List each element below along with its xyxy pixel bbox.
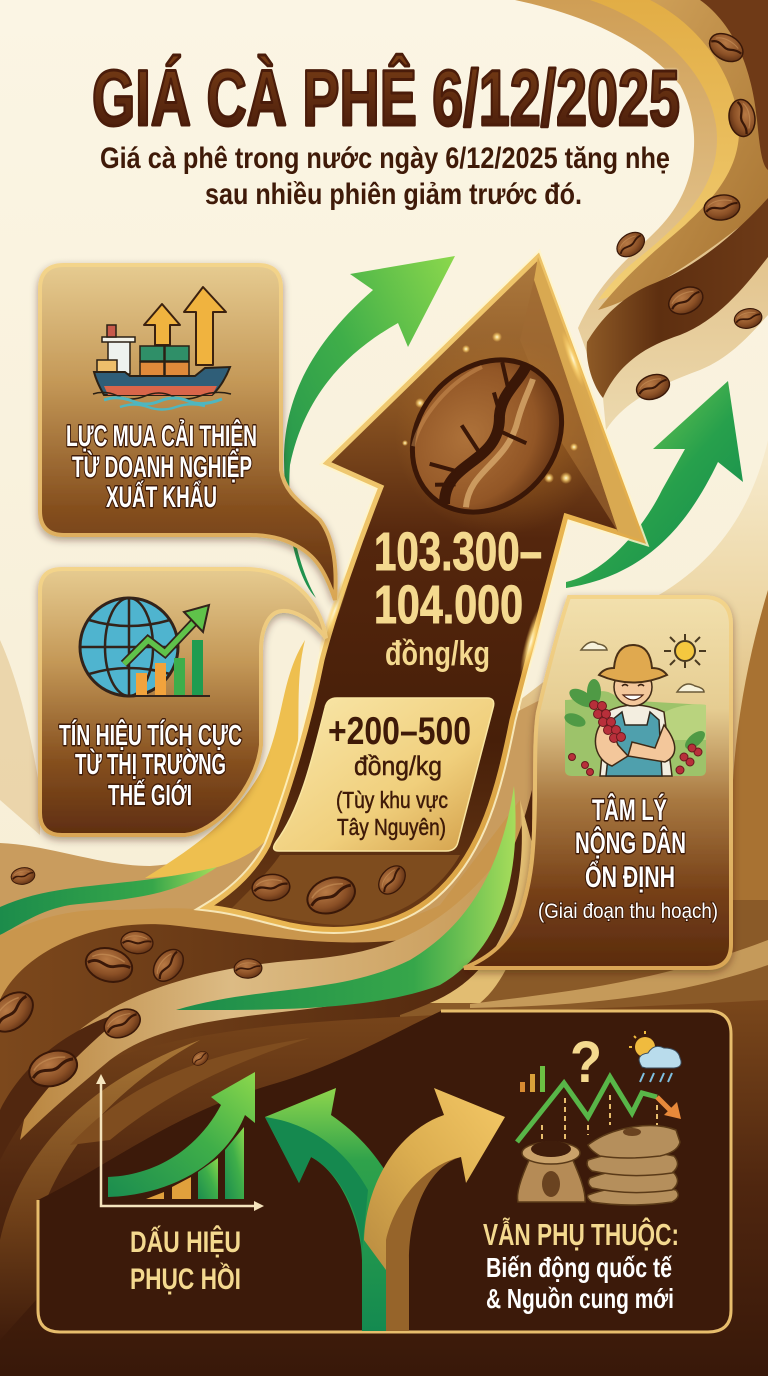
price text: [374, 522, 542, 673]
card three text: TÂM LÝ: [592, 793, 667, 827]
panel: world market: TỪ THỊ TRƯỜNG: [75, 747, 226, 781]
chart axes: [101, 1080, 258, 1206]
background: gold band: [0, 800, 520, 1000]
arrow glow spot: [395, 335, 605, 535]
background: main brown wave: [587, 198, 768, 398]
change badge: (Tùy khu vực: [336, 787, 448, 813]
under-sweep: [232, 855, 460, 925]
background: light stripe below farmer card: [470, 940, 768, 1008]
sparkles: [402, 332, 578, 484]
background: top right dark brown corner: [700, 0, 768, 170]
card one shape: [40, 265, 336, 600]
gold branch: [364, 1088, 505, 1270]
green branch: [265, 1088, 386, 1331]
question mark: ?: [570, 1030, 602, 1095]
arrow right bevel: [534, 257, 642, 540]
panel fill: [38, 1011, 731, 1332]
glint left: [315, 565, 355, 655]
label: dependency: VẪN PHỤ THUỘC:: [483, 1216, 679, 1252]
falling arrow head: [664, 1102, 681, 1119]
panel: farmer sentiment: [464, 597, 731, 968]
panel: export buying: TỪ DOANH NGHIỆP: [72, 450, 252, 484]
background: top right pale tan swirl: [515, 0, 768, 430]
panel: farmer sentiment: ỔN ĐỊNH: [585, 860, 675, 894]
fork arrows: [265, 1088, 505, 1331]
icon: smiling farmer with coffee cherries: [563, 634, 708, 776]
green arrow right: [566, 381, 743, 588]
axis arrowheads: [96, 1074, 264, 1211]
arrow halo: [207, 257, 642, 929]
background: cream tan band: [20, 870, 490, 1140]
background: top right gold swirl: [590, 0, 768, 300]
price text: 103.300–: [374, 522, 542, 582]
rising arrow: [108, 1072, 255, 1197]
change badge: Tây Nguyên): [337, 814, 446, 840]
icon: globe with growth chart: [80, 598, 210, 697]
green branch inner: [265, 1117, 368, 1250]
icon: cargo ship with rising arrows: [93, 287, 231, 410]
card one text: LỰC MUA CẢI THIỆN: [66, 419, 257, 453]
background: mid streak: [70, 1038, 310, 1145]
dashed guides: [542, 1095, 657, 1150]
change badge: đồng/kg: [354, 751, 442, 781]
background: right tan swirl: [520, 440, 768, 1020]
background: right edge stripes: [732, 590, 768, 1020]
background: area below farmer card: [400, 900, 768, 1040]
weather: [629, 1031, 681, 1082]
background: lower tan field: [0, 700, 540, 1060]
chart: recovery sign: [96, 1072, 264, 1211]
falling orange arrow: [657, 1097, 672, 1112]
background: gold band right of green: [430, 800, 534, 1003]
background: green band lower: [176, 786, 516, 1010]
badge shape: [274, 698, 494, 851]
panel: export buying: XUẤT KHẨU: [106, 480, 217, 514]
small bars: [520, 1066, 545, 1092]
panel: farmer sentiment: (Giai đoạn thu hoạch): [538, 900, 718, 923]
brown branch: [386, 1157, 461, 1331]
subtitle: [100, 142, 670, 211]
icon: volatility chart, sacks and weather: [517, 1030, 681, 1205]
central arrow: [207, 257, 642, 929]
panel: world market: THẾ GIỚI: [108, 778, 192, 812]
glint right: [558, 329, 588, 389]
badge text: +200–500: [328, 710, 471, 753]
panel: farmer sentiment: NỘNG DÂN: [575, 826, 686, 860]
background: green ribbon left: [0, 867, 217, 935]
label: dependency: & Nguồn cung mới: [486, 1283, 674, 1314]
label: dependency: Biến động quốc tế: [486, 1252, 672, 1283]
arrow body: [207, 257, 642, 929]
background: brown band: [0, 790, 532, 1110]
arrow light facet: [520, 280, 618, 532]
chart bars: [146, 1127, 244, 1199]
stacked bags: [587, 1126, 680, 1205]
card three shape: [464, 597, 731, 968]
background: left pale wisps: [0, 640, 40, 835]
label: recovery sign: DẤU HIỆU: [130, 1225, 241, 1259]
beans scattered: [0, 28, 764, 1092]
subtitle: sau nhiều phiên giảm trước đó.: [205, 178, 582, 211]
panel border: [38, 1011, 731, 1332]
green arrow top: [284, 256, 455, 598]
panel: export buying: [40, 265, 336, 600]
label: recovery sign: [130, 1225, 241, 1296]
sack: [518, 1141, 585, 1202]
background: top right tan band: [598, 0, 768, 310]
background: yellow swoosh behind card two: [145, 640, 305, 878]
card two shape: [40, 569, 326, 835]
glint lower right: [516, 606, 546, 678]
bag bean: [623, 1128, 641, 1136]
background: dark lower field: [0, 1000, 768, 1376]
change badge: [274, 698, 494, 851]
subtitle: Giá cà phê trong nước ngày 6/12/2025 tăng nhẹ: [100, 142, 670, 175]
panel: world market: [40, 569, 326, 835]
volatile line: [517, 1077, 657, 1142]
bottom panel: [38, 1011, 731, 1332]
card two text: TÍN HIỆU TÍCH CỰC: [59, 718, 242, 752]
icon: large coffee bean: [382, 330, 592, 542]
label: recovery sign: PHỤC HỒI: [130, 1262, 241, 1296]
background: lower left dark stripe: [0, 1010, 130, 1160]
background: lower left tan sweep: [0, 1040, 200, 1340]
label: dependency: [483, 1216, 679, 1314]
price text: 104.000: [374, 575, 523, 635]
price text: đồng/kg: [385, 635, 490, 673]
